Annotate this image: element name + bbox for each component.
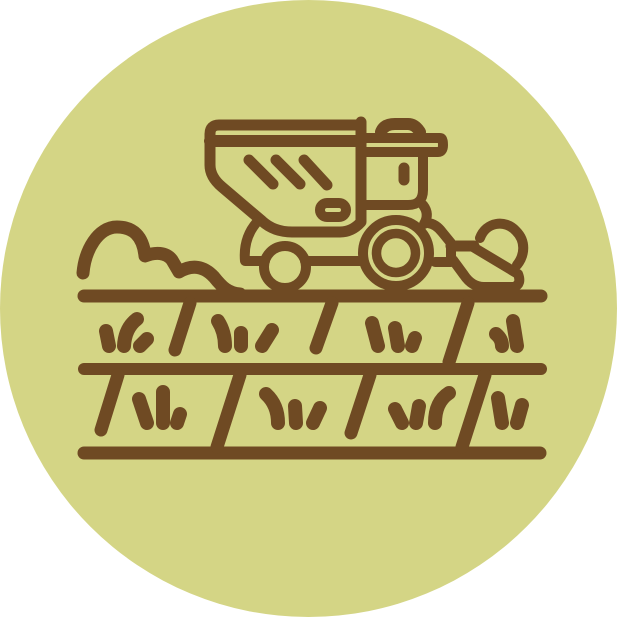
crops row 2 — [139, 392, 522, 423]
row line 1 — [84, 290, 541, 302]
hopper body — [210, 122, 361, 232]
cab side window — [398, 168, 410, 180]
hopper window slashes — [249, 160, 327, 185]
field rows — [84, 296, 541, 453]
field divider slashes — [101, 303, 485, 447]
icon: combine harvester — [210, 122, 523, 288]
header cutter — [453, 247, 519, 287]
axle bar — [305, 256, 362, 266]
row line 3 — [84, 446, 540, 460]
front arm — [428, 223, 451, 262]
icon artwork — [83, 122, 541, 453]
hopper hatch — [320, 203, 346, 217]
cab cap — [381, 124, 420, 132]
icon: bush — [83, 227, 240, 294]
crops row 1 — [106, 319, 517, 346]
rear arm and axle — [245, 222, 265, 261]
cab wall and floor — [361, 152, 423, 205]
row line 2 — [84, 363, 541, 375]
hopper rim — [210, 135, 361, 147]
header connector — [451, 240, 474, 252]
front wheel — [363, 220, 429, 286]
cab lower skirt — [423, 205, 427, 224]
rear wheel — [264, 246, 306, 288]
cab roof — [361, 138, 443, 152]
header reel — [480, 224, 523, 265]
